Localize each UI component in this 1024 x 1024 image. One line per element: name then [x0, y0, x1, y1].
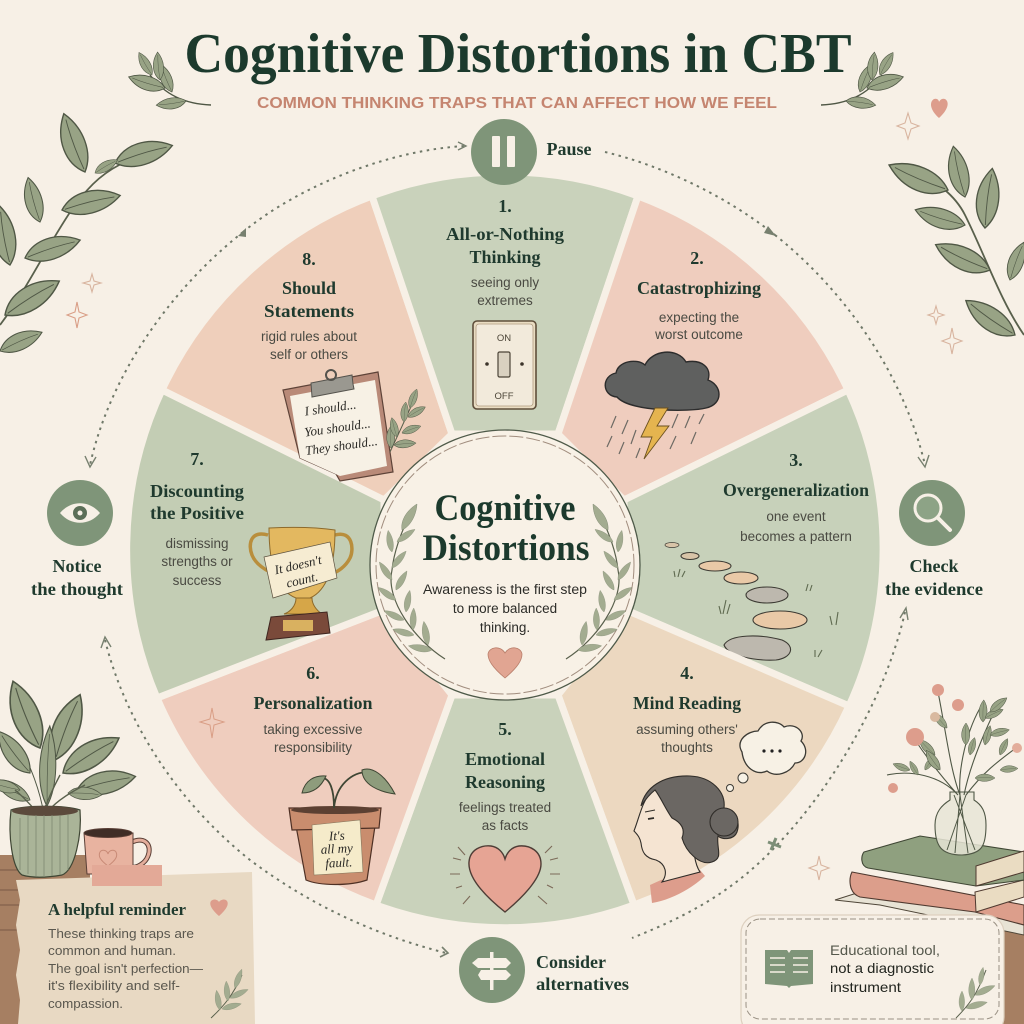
text: reminder body: The goal isn't perfection—: [48, 961, 203, 976]
icon: stepping stones: [665, 542, 838, 660]
label: mind reading: thoughts: [661, 740, 713, 755]
label: discounting the positive: success: [173, 573, 222, 588]
step: consider alternatives: alternatives: [536, 974, 629, 994]
title: Cognitive Distortions in CBT: [184, 23, 852, 85]
text: reminder body: These thinking traps are: [48, 926, 194, 941]
label: catastrophizing: expecting the: [659, 310, 739, 325]
label: emotional reasoning: feelings treated: [459, 800, 551, 815]
label: all or nothing thinking: 1.: [498, 196, 512, 216]
text: awareness message: [423, 582, 587, 635]
panel: wedge 6 personalization: [157, 610, 452, 905]
icon: storm cloud with lightning: [605, 352, 719, 459]
panel: educational tool note: [741, 915, 1004, 1024]
center circle: [370, 430, 640, 700]
icon: potted seedling with note: [289, 769, 395, 884]
panel: wedge 8 should statements: [162, 196, 452, 500]
label: discounting the positive: strengths or: [161, 554, 233, 569]
icon: small sprig: [956, 967, 996, 1018]
icon: clipboard with should notes: [283, 370, 427, 481]
text: awareness message: Awareness is the first step: [423, 582, 587, 597]
icon: trophy with note: [250, 527, 352, 640]
label: discounting the positive: 7.: [190, 449, 204, 469]
heading: center title: Cognitive: [434, 488, 576, 529]
label: discounting the positive: dismissing: [165, 536, 229, 551]
text: reminder body: common and human.: [48, 943, 176, 958]
icon: potted seedling with note: fault.: [325, 854, 353, 871]
label: personalization: 6.: [306, 663, 320, 683]
label: all or nothing thinking: extremes: [477, 293, 533, 308]
text: awareness message: to more balanced: [453, 601, 557, 616]
heading: center title: [422, 488, 590, 569]
icon: clipboard with should notes: I should...: [303, 396, 357, 419]
illustration: potted plant: [0, 677, 138, 877]
label: discounting the positive: Discounting: [150, 481, 244, 501]
icon: light switch: [473, 321, 536, 409]
heading: center title: Distortions: [422, 528, 590, 569]
icon: center heart: [488, 648, 522, 678]
text: educational tool disclaimer: Educational tool,: [830, 942, 940, 958]
label: personalization: [254, 663, 372, 755]
label: should statements: 8.: [302, 249, 316, 269]
icon: potted seedling with note: It's: [327, 828, 345, 843]
illustration: books and flower vase: [835, 684, 1024, 1024]
tape: [92, 865, 162, 886]
step: pause: Pause: [546, 139, 592, 159]
icon: large branch right: [884, 144, 1024, 345]
panel: wedge 5 emotional reasoning: [376, 695, 634, 928]
label: should statements: Should: [282, 278, 336, 298]
label: emotional reasoning: 5.: [498, 719, 512, 739]
label: emotional reasoning: as facts: [482, 818, 529, 833]
icon: sparkles: [67, 113, 962, 880]
label: emotional reasoning: Emotional: [465, 749, 545, 769]
illustration: left wooden table: [0, 855, 90, 1024]
icon: title laurel right: [821, 50, 905, 110]
text: awareness message: thinking.: [480, 620, 530, 635]
label: mind reading: [633, 663, 741, 755]
label: emotional reasoning: Reasoning: [465, 772, 545, 792]
step: notice the thought: Notice: [53, 556, 101, 576]
icon: small heart top right: [931, 99, 948, 118]
text: educational tool disclaimer: not a diagnostic: [830, 960, 934, 976]
icon: large branch left: [0, 110, 175, 358]
text: reminder body: compassion.: [48, 996, 123, 1011]
text: reminder body: it's flexibility and self-: [48, 978, 180, 993]
label: personalization: taking excessive: [263, 722, 363, 737]
text: reminder body: [48, 926, 203, 1011]
label: should statements: [261, 249, 357, 362]
label: mind reading: Mind Reading: [633, 693, 741, 713]
label: overgeneralization: becomes a pattern: [740, 529, 852, 544]
panel: wedge 2 catastrophizing: [558, 196, 848, 500]
step: check the evidence: [885, 480, 983, 599]
label: mind reading: 4.: [680, 663, 694, 683]
label: emotional reasoning: [459, 719, 551, 833]
label: should statements: Statements: [264, 301, 354, 321]
subtitle: COMMON THINKING TRAPS THAT CAN AFFECT HOW WE FEEL: [257, 95, 777, 112]
step: check the evidence: Check: [910, 556, 958, 576]
step: consider alternatives: [459, 937, 629, 1003]
icon: title laurel left: [126, 50, 211, 111]
icon: open book: [765, 950, 813, 988]
label: all or nothing thinking: seeing only: [471, 275, 539, 290]
icon: sparkle: [200, 708, 224, 738]
label: overgeneralization: one event: [766, 509, 826, 524]
icon: thought bubble: [726, 722, 806, 792]
label: all or nothing thinking: All-or-Nothing: [446, 224, 564, 244]
label: catastrophizing: 2.: [690, 248, 704, 268]
label: personalization: Personalization: [254, 693, 372, 713]
icon: light switch: OFF: [494, 391, 514, 402]
panel: helpful reminder note: [16, 865, 255, 1024]
panel: wedge 7 discounting the positive: [127, 390, 384, 698]
label: discounting the positive: the Positive: [150, 503, 244, 523]
label: overgeneralization: Overgeneralization: [723, 480, 869, 500]
icon: light switch: ON: [497, 333, 511, 344]
label: should statements: self or others: [270, 347, 348, 362]
icon: center laurel left: [376, 502, 445, 659]
icon: center laurel right: [566, 502, 634, 659]
label: overgeneralization: 3.: [789, 450, 803, 470]
label: mind reading: assuming others': [636, 722, 738, 737]
icon: trophy with note: count.: [285, 569, 319, 591]
panel: wedge 3 overgeneralization: [624, 390, 883, 706]
label: overgeneralization: [723, 450, 869, 544]
flow arrows ring: [85, 142, 929, 957]
label: catastrophizing: worst outcome: [654, 327, 743, 342]
label: discounting the positive: [150, 449, 244, 588]
step: consider alternatives: Consider: [536, 952, 606, 972]
step: check the evidence: the evidence: [885, 579, 983, 599]
icon: clipboard with should notes: They should...: [304, 433, 379, 458]
panel: wedge 1 all or nothing: [372, 172, 638, 434]
label: should statements: rigid rules about: [261, 329, 357, 344]
icon: small heart: [210, 899, 228, 916]
icon: woman in profile: [634, 776, 738, 903]
label: all or nothing thinking: Thinking: [469, 247, 541, 267]
label: catastrophizing: [637, 248, 761, 342]
icon: glowing heart: [450, 846, 560, 912]
heading: a helpful reminder: A helpful reminder: [48, 900, 186, 919]
icon: trophy with note: It doesn't: [272, 552, 323, 578]
icon: potted seedling with note: all my: [320, 840, 353, 857]
icon: small sprig: [211, 968, 249, 1018]
label: all or nothing thinking: [446, 196, 564, 308]
text: educational tool disclaimer: [830, 942, 940, 995]
step: pause: [471, 119, 592, 185]
icon: clipboard with should notes: You should...: [303, 415, 371, 440]
panel: wedge 4 mind reading: [558, 610, 849, 905]
label: catastrophizing: Catastrophizing: [637, 278, 761, 298]
label: personalization: responsibility: [274, 740, 352, 755]
step: notice the thought: [31, 480, 123, 599]
illustration: pink mug: [84, 828, 149, 874]
step: notice the thought: the thought: [31, 579, 123, 599]
text: educational tool disclaimer: instrument: [830, 979, 901, 995]
